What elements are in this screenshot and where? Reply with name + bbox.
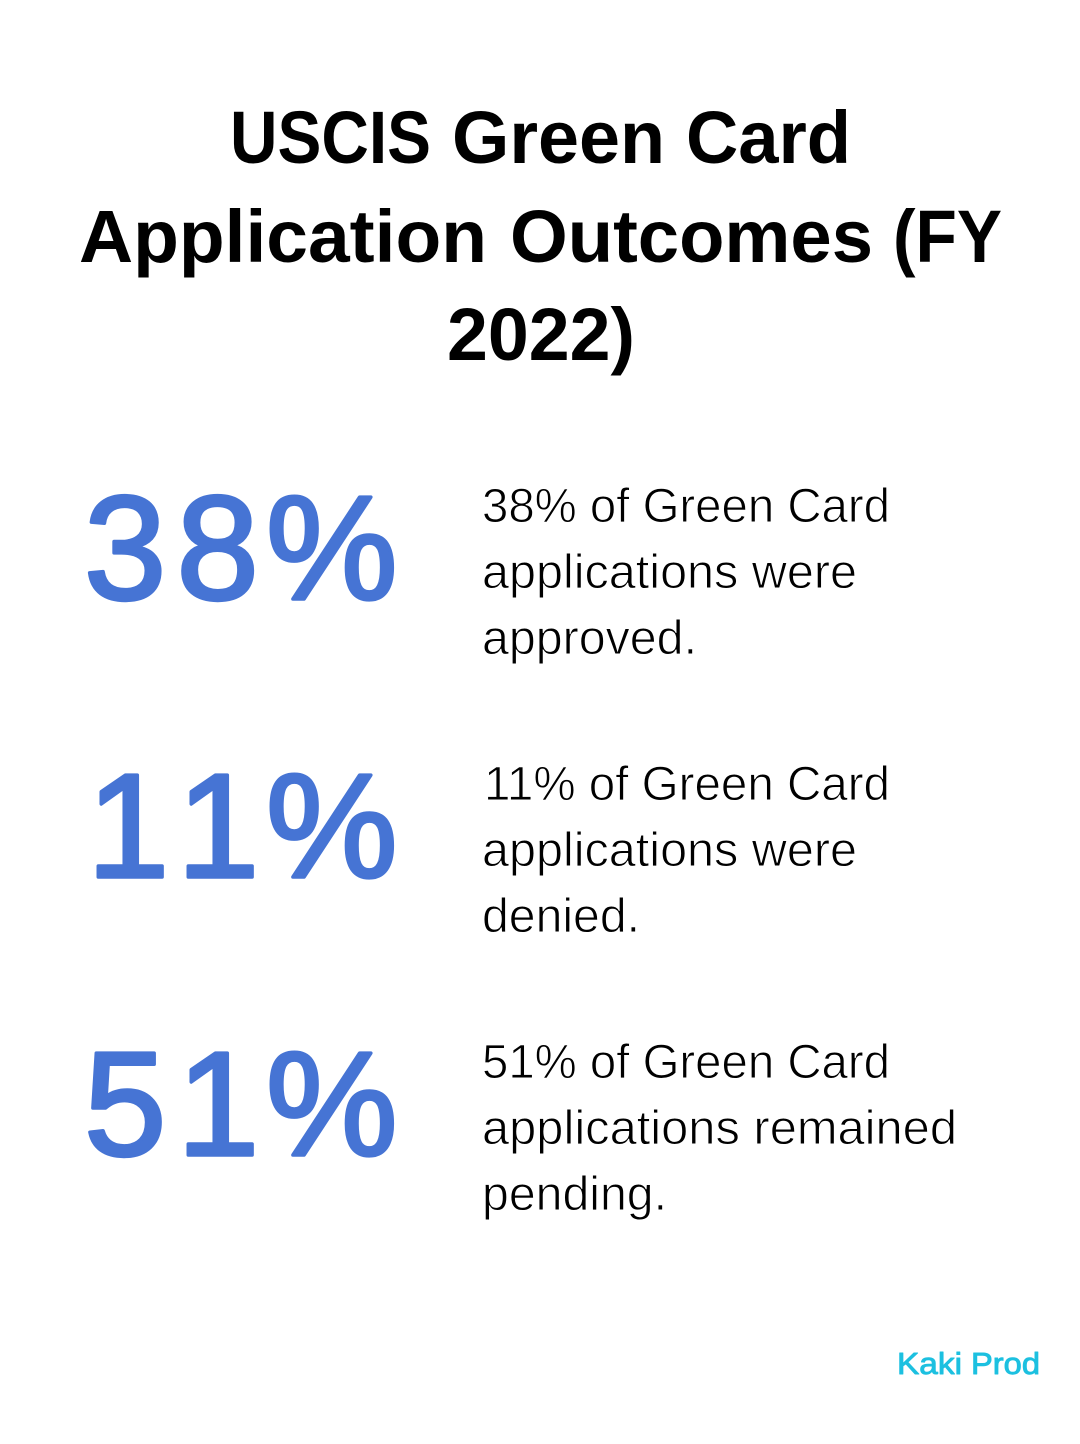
big number: 38%: 38% [84, 466, 398, 631]
title: Green [452, 96, 665, 179]
title: (FY [893, 195, 1002, 278]
title: Application [79, 195, 487, 278]
description: denied: denied. [482, 890, 640, 943]
description: denied: applications were [482, 824, 857, 877]
title: Outcomes [510, 195, 873, 278]
title: USCIS [230, 96, 431, 179]
big number: 51%: 51% [84, 1022, 398, 1187]
big number: 11%: 11% [87, 744, 398, 909]
description: approved: applications were [482, 546, 857, 599]
title [79, 96, 1002, 376]
logo: Kaki Prod: Prod [971, 1346, 1040, 1381]
title: 2022) [447, 293, 635, 376]
description: approved: approved. [482, 612, 697, 665]
description: denied: 11% of Green Card [484, 758, 890, 811]
description: approved: 38% of Green Card [482, 480, 890, 533]
description: pending: applications remained [482, 1102, 957, 1155]
logo: Kaki Prod [897, 1346, 1040, 1381]
description: approved [482, 480, 890, 665]
title: Card [686, 96, 851, 179]
description: pending [482, 1036, 957, 1221]
stat: approved 38% [84, 466, 890, 665]
description: denied [482, 758, 890, 943]
description: pending: pending. [482, 1168, 667, 1221]
description: pending: 51% of Green Card [482, 1036, 890, 1089]
stat: denied 11% [87, 744, 890, 943]
stat: pending 51% [84, 1022, 957, 1221]
logo: Kaki Prod: Kaki [897, 1346, 962, 1381]
